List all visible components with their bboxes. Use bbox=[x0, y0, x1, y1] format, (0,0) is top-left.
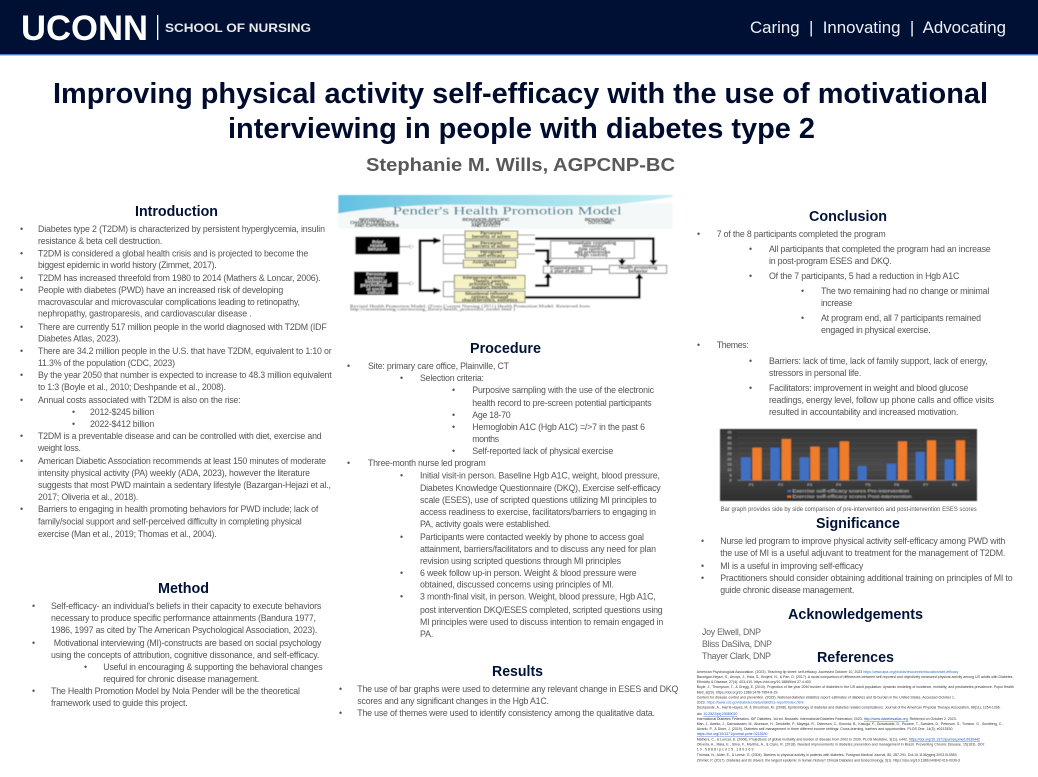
results bullets: The use of themes were used to identify consistency among the qualitative data. bbox=[357, 708, 655, 718]
procedure bullets: • bbox=[452, 385, 455, 395]
introduction bullets: American Diabetic Association recommends at least 150 minutes of moderate bbox=[38, 456, 326, 466]
diagram: Pender's Health Promotion Model: and preferences bbox=[574, 250, 611, 255]
reference list: https://doi.org/10/1371/journal.pone.0213530 bbox=[697, 732, 767, 736]
conclusion bullets: Barriers: lack of time, lack of family support, lack of energy, bbox=[769, 356, 988, 366]
method bullets: using the concepts of attribution, cognitive dissonance, and self-efficacy. bbox=[51, 650, 319, 660]
diagram: Pender's Health Promotion Model: behavior bbox=[628, 268, 648, 273]
diagram: Pender's Health Promotion Model: al socio- bbox=[367, 286, 386, 291]
introduction bullets: macrovascular and microvascular complications leading to retinopathy, bbox=[38, 297, 300, 307]
author: Stephanie M. Wills, AGPCNP-BC bbox=[366, 154, 675, 175]
method bullets: • bbox=[32, 601, 35, 611]
procedure bullets: obtained, discussed concerns using principles of MI. bbox=[420, 580, 614, 590]
diagram: Pender's Health Promotion Model: characteristics, esthetics bbox=[462, 298, 518, 303]
procedure bullets: • bbox=[400, 568, 403, 578]
panel: procedure bbox=[347, 341, 663, 639]
diagram: Pender's Health Promotion Model: Activity-related bbox=[473, 259, 506, 264]
x axis labels: P3 bbox=[807, 482, 813, 487]
diagram: Pender's Health Promotion Model: Personal bbox=[366, 272, 386, 277]
reference list: Centers for disease control and prevention. (2023). National diabetes statistics report: estimates of diabetes and its burden in the United States. Accessed October 1, bbox=[697, 696, 955, 700]
diagram: Pender's Health Promotion Model: biological bbox=[365, 279, 387, 284]
significance bullets: • bbox=[701, 536, 704, 546]
reference list: International Diabetes Federation. IDF Diabetes. 1st ed. Brussels: International Diabetes Federation; 2023. http://www.diabetesatlas.org. Retrieved on October 2, 2023. bbox=[697, 717, 957, 721]
introduction bullets: By the year 2050 that number is expected to increase to 48.3 million equivalent bbox=[38, 370, 332, 380]
procedure bullets: Three-month nurse led program bbox=[368, 458, 486, 468]
introduction bullets: • bbox=[20, 431, 23, 441]
diagram: Pender's Health Promotion Model: Perceived bbox=[480, 231, 502, 236]
diagram: Pender's Health Promotion Model: INDIVIDUAL bbox=[359, 217, 386, 222]
introduction bullets bbox=[20, 224, 332, 539]
introduction bullets: • bbox=[72, 407, 75, 417]
introduction bullets: 2022-$412 billion bbox=[90, 419, 154, 429]
procedure bullets: Hemoglobin A1C (Hgb A1C) =/>7 in the past 6 bbox=[472, 422, 645, 432]
y axis labels: 30 bbox=[727, 446, 732, 451]
diagram: Pender's Health Promotion Model: Commitment to bbox=[550, 265, 585, 270]
diagram: Pender's Health Promotion Model: demands bbox=[582, 244, 603, 249]
significance bullets: • bbox=[701, 561, 704, 571]
method bullets: required for chronic disease management. bbox=[103, 674, 259, 684]
reference list: Boyle, J., Thompson, T., & Gregg, E. (2010). Projection of the year 2050 burden of diabetes in the US adult population: dynamic modeling of incidence, mortality, and prediabetes prevalence. Popul Health bbox=[697, 685, 1014, 689]
reference list: Zimmet, P. (2017). Diabetes and its drivers: the largest epidemic in human history? Clinical Diabetes and Endocrinology, 3(1). https://doi.org/10.1186/s40842-016-0039-3 bbox=[697, 759, 960, 763]
panel: method bbox=[32, 581, 323, 708]
diagram: Pender's Health Promotion Model: COGNITIONS bbox=[471, 220, 501, 225]
results bullets: scores and any significant changes in the Hgb A1C. bbox=[357, 696, 549, 706]
conclusion bullets: resulted in accountability and increased motivation. bbox=[769, 407, 958, 417]
reference list: Thomas, N., Alder, E., & Leese, G. (2004). Barriers to physical activity in patients with diabetes. Postgrad Medical Journal, 80, 287-291. Doi:10.1136/pgmj.2003.010553 bbox=[697, 753, 957, 757]
x axis labels: P7 bbox=[923, 482, 929, 487]
procedure bullets: Participants were contacted weekly by phone to access goal bbox=[420, 532, 644, 542]
x axis labels: P6 bbox=[894, 482, 900, 487]
x axis labels: P5 bbox=[866, 482, 871, 487]
tagline: Caring | Innovating | Advocating bbox=[750, 18, 1006, 37]
heading: method: Method bbox=[158, 581, 209, 597]
heading: introduction: Introduction bbox=[135, 204, 218, 220]
conclusion bullets: 7 of the 8 participants completed the program bbox=[717, 229, 886, 239]
diagram: Pender's Health Promotion Model: Perceived bbox=[480, 250, 502, 255]
introduction bullets: nephropathy, gastroparesis, and cardiovascular disease . bbox=[38, 308, 252, 318]
significance bullets: the use of MI is a useful adjuvant to treatment for the management of T2DM. bbox=[720, 548, 1005, 558]
introduction bullets: T2DM is a preventable disease and can be controlled with diet, exercise and bbox=[38, 431, 322, 441]
bar chart: ESES pre vs post intervention bbox=[720, 429, 977, 501]
introduction bullets: There are 34.2 million people in the U.S. that have T2DM, equivalent to 1:10 or bbox=[38, 346, 332, 356]
diagram: Pender's Health Promotion Model: Immediate competing bbox=[568, 241, 616, 246]
procedure bullets: PA. bbox=[420, 629, 433, 639]
y axis labels: 5 bbox=[729, 472, 732, 477]
procedure bullets: PA, activity goals were established. bbox=[420, 519, 551, 529]
x axis labels: P8 bbox=[952, 482, 958, 487]
conclusion bullets: • bbox=[801, 313, 804, 323]
procedure bullets: scale (ESES), use of scripted questions utilizing MI principles to bbox=[420, 495, 657, 505]
conclusion bullets: The two remaining had no change or minimal bbox=[821, 286, 989, 296]
y axis labels: 20 bbox=[727, 456, 732, 461]
reference list: American Psychological Association. (2023). Teaching tip sheet: self-efficacy. Accessed October 10, 2023 https://www.apa.org/pi/aids/resources/education/self-efficacy bbox=[697, 670, 959, 674]
logo: UConn School of Nursing bbox=[21, 9, 311, 48]
x axis labels: P1 bbox=[749, 482, 755, 487]
introduction bullets: • bbox=[72, 419, 75, 429]
diagram: Pender's Health Promotion Model: http://currentnursing.com/nursing_theory/health_promotion_model.html ) bbox=[350, 307, 516, 312]
method bullets: • bbox=[32, 686, 35, 696]
diagram: Pender's Health Promotion Model: providers); norms, bbox=[469, 282, 510, 287]
diagram: Pender's Health Promotion Model: OUTCOME bbox=[588, 220, 612, 225]
introduction bullets: Annual costs associated with T2DM is also on the rise: bbox=[38, 395, 241, 405]
logo: UConn School of Nursing: UCONN bbox=[21, 9, 148, 48]
panel: references bbox=[697, 650, 1014, 763]
procedure bullets: post intervention DKQ/ESES completed, scripted questions using bbox=[420, 605, 663, 615]
method bullets: 1986, 1997 as cited by The American Psychological Association, 2023). bbox=[51, 625, 317, 635]
panel: significance bbox=[701, 516, 1013, 595]
y axis labels: 40 bbox=[727, 435, 732, 440]
reference list: Bazargan-Hejazi, S., Arroyo, J., Hsia, S., Brojeni, N., & Pan, D. (2017). A racial comparison of differences between self-reported and objectively measured physical activity among US adults with Diabetes. bbox=[697, 675, 1013, 679]
introduction bullets: • bbox=[20, 273, 23, 283]
reference list: Man, J., Aweko, J., Daivadanam, M., Alvesson, H., Delobelle, P., Mayega, R., Ostenson, C., Kirunda, B., Kasuga, F., Guwatudde, D., Puoane, T., Sanders, D., Peterson, S., Tomson, G., Sundberg, C., bbox=[697, 722, 1003, 726]
significance bullets: MI is a useful in improving self-efficacy bbox=[720, 561, 864, 571]
heading: acknowledgements: Acknowledgements bbox=[788, 607, 923, 623]
diagram: Pender's Health Promotion Model: support, models bbox=[472, 285, 508, 290]
diagram: Pender's Health Promotion Model: (High control) bbox=[577, 253, 608, 258]
method bullets bbox=[32, 601, 323, 708]
significance bullets: • bbox=[701, 573, 704, 583]
diagram: Pender's Health Promotion Model: BEHAVIORAL bbox=[585, 217, 615, 222]
chart legend: Exercise self-efficacy scores Pre-intervention bbox=[792, 488, 910, 493]
diagram: Pender's Health Promotion Model: Interpersonal influences bbox=[463, 275, 517, 280]
reference list: doi: 10.2522/ptj.20080020 bbox=[697, 712, 737, 716]
procedure bullets: months bbox=[472, 434, 500, 444]
panel: introduction bbox=[20, 204, 332, 539]
procedure bullets: • bbox=[400, 592, 403, 602]
method bullets: The Health Promotion Model by Nola Pender will be the theoretical bbox=[51, 686, 300, 696]
conclusion bullets: • bbox=[697, 340, 700, 350]
y axis labels: 25 bbox=[727, 451, 732, 456]
acknowledgement names: Bliss DaSilva, DNP bbox=[702, 639, 772, 649]
introduction bullets: weight loss. bbox=[37, 443, 81, 453]
procedure bullets: • bbox=[400, 532, 403, 542]
introduction bullets: • bbox=[20, 370, 23, 380]
x axis labels: P2 bbox=[778, 482, 784, 487]
procedure bullets: 6 week follow up-in person. Weight & blood pressure were bbox=[420, 568, 637, 578]
title: Improving physical activity self-efficacy with the use of motivational bbox=[53, 78, 988, 110]
diagram: Pender's Health Promotion Model: Perceived bbox=[480, 240, 502, 245]
procedure bullets: Site: primary care office, Plainville, CT bbox=[368, 361, 510, 371]
heading: references: References bbox=[817, 650, 894, 666]
procedure bullets: • bbox=[347, 458, 350, 468]
reference list: 10.5888/pcd15.180269 bbox=[697, 748, 753, 752]
y axis labels: 0 bbox=[729, 478, 732, 483]
heading: procedure: Procedure bbox=[470, 341, 541, 357]
conclusion bullets: At program end, all 7 participants remained bbox=[821, 313, 981, 323]
conclusion bullets bbox=[697, 229, 995, 417]
conclusion bullets: engaged in physical exercise. bbox=[821, 325, 931, 335]
introduction bullets: 11.3% of the population (CDC, 2023) bbox=[38, 358, 175, 368]
x axis labels bbox=[749, 482, 958, 487]
procedure bullets: health record to pre-screen potential participants bbox=[472, 398, 652, 408]
diagram: Pender's Health Promotion Model: Revised Health Promotion Model. (From Current Nursing (2011) Health Promotion Model. Retrieved from bbox=[350, 304, 591, 309]
introduction bullets: • bbox=[20, 285, 23, 295]
chart legend: Exercise self-efficacy scores Post-intervention bbox=[792, 494, 912, 499]
introduction bullets: • bbox=[20, 395, 23, 405]
diagram: Pender's Health Promotion Model: AND AFFECT bbox=[471, 223, 501, 228]
heading: results: Results bbox=[492, 664, 543, 680]
introduction bullets: T2DM has increased threefold from 1980 to 2014 (Mathers & Loncar, 2006). bbox=[38, 273, 321, 283]
conclusion bullets: in post-program ESES and DKQ. bbox=[769, 256, 892, 266]
x axis labels: P4 bbox=[836, 482, 842, 487]
reference list: Oliveira, A., Maia, E., Silva, F., Martins, A., & Claro, R. (2018). Needed improvements in diabetes prevention and management in Brazil. Preventing Chronic Disease, 15(163). DOI: bbox=[697, 742, 985, 746]
procedure bullets: Age 18-70 bbox=[472, 410, 511, 420]
diagram: Pender's Health Promotion Model: (family, peers, bbox=[474, 278, 505, 283]
significance bullets: Practitioners should consider obtaining additional training on principles of MI to bbox=[720, 573, 1013, 583]
reference list: Mathers, C., & Loncar, D. (2006). Projections of global mortality and burden of disease from 2002 to 2030. PLOS Medicine, 3(11), e442. https://doi.org/10.1371/journal.pmed.0030442 bbox=[697, 737, 980, 741]
introduction bullets: • bbox=[20, 322, 23, 332]
heading: conclusion: Conclusion bbox=[809, 209, 887, 225]
y axis labels: 45 bbox=[727, 430, 732, 435]
significance bullets: guide chronic disease management. bbox=[720, 585, 854, 595]
introduction bullets: 2017; Oliveria et al., 2018). bbox=[38, 492, 138, 502]
procedure bullets: Selection criteria: bbox=[420, 373, 484, 383]
introduction bullets: exercise (Man et al., 2019; Thomas et al., 2004). bbox=[38, 529, 217, 539]
introduction bullets: T2DM is considered a global health crisis and is projected to become the bbox=[38, 248, 308, 258]
y axis labels: 10 bbox=[727, 467, 732, 472]
pre-intervention bars bbox=[741, 448, 954, 480]
conclusion bullets: Facilitators: improvement in weight and blood glucose bbox=[769, 383, 968, 393]
procedure bullets: access readiness to exercise, facilitators/barriers to engaging in bbox=[420, 507, 656, 517]
diagram: Pender's Health Promotion Model: BEHAVIOR-SPECIFIC bbox=[462, 217, 510, 222]
title bbox=[53, 78, 988, 145]
reference list: Metr, 8(29). https://doi.org/10.1186/1478-7954-8-29 bbox=[697, 690, 777, 694]
conclusion bullets: stressors in personal life. bbox=[769, 368, 861, 378]
panel: conclusion bbox=[697, 209, 995, 417]
diagram: Pender's Health Promotion Model: Situational influences: bbox=[465, 291, 515, 296]
procedure bullets: Diabetes Knowledge Questionnaire (DKQ), Exercise self-efficacy bbox=[420, 483, 661, 493]
introduction bullets: • bbox=[20, 346, 23, 356]
diagram: Pender's Health Promotion Model: factors: bbox=[367, 275, 385, 280]
conclusion bullets: All participants that completed the program had an increase bbox=[769, 244, 991, 254]
introduction bullets: • bbox=[20, 248, 23, 258]
diagram: Pender's Health Promotion Model: self-efficacy bbox=[478, 253, 505, 258]
header banner bbox=[0, 0, 1038, 55]
procedure bullets: • bbox=[400, 471, 403, 481]
diagram: Pender's Health Promotion Model: Health-promoting bbox=[619, 265, 658, 270]
procedure bullets: Purposive sampling with the use of the electronic bbox=[472, 385, 655, 395]
reference list: Ethnicity & Disease, 27(4), 403-410. https://doi.org/10.18865/ed.27.4.403 bbox=[697, 680, 811, 684]
method bullets: • bbox=[84, 662, 87, 672]
conclusion bullets: • bbox=[749, 383, 752, 393]
conclusion bullets: • bbox=[801, 286, 804, 296]
diagram: Pender's Health Promotion Model: CHARACTERISTICS bbox=[350, 220, 395, 225]
results bullets: The use of bar graphs were used to determine any relevant change in ESES and DKQ bbox=[357, 684, 678, 694]
introduction bullets: family/social support and self-perceived difficulty in completing physical bbox=[38, 516, 302, 526]
acknowledgement names bbox=[702, 627, 772, 661]
diagram: Pender's Health Promotion Model: cultural bbox=[368, 290, 384, 295]
title: interviewing in people with diabetes type 2 bbox=[228, 113, 815, 145]
y axis labels bbox=[727, 430, 732, 483]
diagram: Pender's Health Promotion Model: AND EXPERIENCES bbox=[354, 223, 399, 228]
conclusion bullets: • bbox=[749, 244, 752, 254]
procedure bullets: • bbox=[400, 373, 403, 383]
diagram: Pender's Health Promotion Model: Prior bbox=[372, 239, 383, 244]
panel: results bbox=[339, 664, 678, 718]
reference list: 2023. https://www.cdc.gov/diabetes/data/statistics-report/index.html bbox=[697, 701, 804, 705]
panel: acknowledgements bbox=[702, 607, 923, 661]
procedure bullets: revision using scripted questions through MI principles bbox=[420, 556, 622, 566]
introduction bullets: There are currently 517 million people in the world diagnosed with T2DM (IDF bbox=[38, 322, 327, 332]
conclusion bullets: • bbox=[749, 356, 752, 366]
acknowledgement names: Joy Elwell, DNP bbox=[702, 627, 761, 637]
diagram: Pender's Health Promotion Model: affect bbox=[483, 263, 496, 268]
introduction bullets: to 1:3 (Boyle et al., 2010; Deshpande et al., 2008). bbox=[38, 382, 226, 392]
procedure bullets: 3 month-final visit, in person. Weight, blood pressure, Hgb A1C, bbox=[420, 592, 656, 602]
diagram: Pender's Health Promotion Model: a plan of action bbox=[550, 269, 585, 274]
procedure bullets bbox=[347, 361, 663, 639]
method bullets: Motivational interviewing (MI)-constructs are based on social psychology bbox=[54, 638, 322, 648]
diagram: Pender's Health Promotion Model: related bbox=[370, 243, 385, 248]
introduction bullets: • bbox=[20, 224, 23, 234]
introduction bullets: intensity physical activity (PA) weekly (ADA, 2023), however the literature bbox=[38, 468, 310, 478]
procedure bullets: Self-reported lack of physical exercise bbox=[472, 446, 613, 456]
procedure bullets: attainment, barriers/facilitators and to discuss any need for plan bbox=[420, 544, 656, 554]
diagram: Pender's Health Promotion Model bbox=[338, 195, 673, 312]
heading: significance: Significance bbox=[816, 516, 900, 532]
conclusion bullets: • bbox=[749, 271, 752, 281]
procedure bullets: MI principles were used to discuss intention to remain engaged in bbox=[420, 617, 663, 627]
results bullets bbox=[339, 684, 678, 718]
introduction bullets: Diabetes Atlas, 2023). bbox=[38, 334, 121, 344]
post-intervention bars bbox=[752, 439, 965, 480]
introduction bullets: • bbox=[20, 456, 23, 466]
conclusion bullets: increase bbox=[821, 298, 852, 308]
procedure bullets: • bbox=[452, 446, 455, 456]
method bullets: necessary to produce specific performance attainments (Bandura 1977, bbox=[51, 613, 316, 623]
introduction bullets: resistance & beta cell destruction. bbox=[38, 236, 162, 246]
results bullets: • bbox=[339, 684, 342, 694]
introduction bullets: 2012-$245 billion bbox=[90, 407, 154, 417]
diagram: Pender's Health Promotion Model: benefits of action bbox=[472, 234, 511, 239]
reference list bbox=[697, 670, 1014, 763]
diagram: Pender's Health Promotion Model: behavior bbox=[368, 247, 388, 252]
significance bullets bbox=[701, 536, 1013, 595]
conclusion bullets: Themes: bbox=[717, 340, 749, 350]
significance bullets: Nurse led program to improve physical activity self-efficacy among PWD with bbox=[720, 536, 1005, 546]
diagram: Pender's Health Promotion Model: psychological bbox=[360, 283, 392, 288]
logo: UConn School of Nursing: SCHOOL OF NURSING bbox=[165, 23, 311, 35]
conclusion bullets: readings, energy level, follow up phone calls and office visits bbox=[769, 395, 995, 405]
introduction bullets: • bbox=[20, 504, 23, 514]
chart legend bbox=[787, 488, 912, 499]
y axis labels: 15 bbox=[727, 462, 732, 467]
diagram: Pender's Health Promotion Model: (low control) bbox=[578, 247, 607, 252]
diagram: Pender's Health Promotion Model: options, demand bbox=[471, 294, 508, 299]
introduction bullets: People with diabetes (PWD) have an increased risk of developing bbox=[38, 285, 283, 295]
y axis labels: 35 bbox=[727, 440, 732, 445]
reference list: Alvarlo, P., & Diner, J. (2019). Diabetes self-management in three different income settings: Cross-learning, barriers and opportunities. PLOS One, 14(3), e0213530. bbox=[697, 727, 953, 731]
chart caption: Bar graph provides side by side comparison of pre-intervention and post-intervention ESES scores bbox=[721, 506, 977, 513]
results bullets: • bbox=[339, 708, 342, 718]
procedure bullets: • bbox=[452, 410, 455, 420]
introduction bullets: biggest epidemic in world history (Zimmet, 2017). bbox=[38, 260, 217, 270]
conclusion bullets: Of the 7 participants, 5 had a reduction in Hgb A1C bbox=[769, 271, 960, 281]
acknowledgement names: Thayer Clark, DNP bbox=[702, 651, 771, 661]
method bullets: framework used to guide this project. bbox=[51, 698, 188, 708]
conclusion bullets: • bbox=[697, 229, 700, 239]
method bullets: • bbox=[32, 638, 35, 648]
introduction bullets: suggests that most PWD maintain a sedentary lifestyle (Bazargan-Hejazi et al., bbox=[38, 480, 331, 490]
introduction bullets: Barriers to engaging in health promoting behaviors for PWD include; lack of bbox=[38, 504, 319, 514]
introduction bullets: Diabetes type 2 (T2DM) is characterized by persistent hyperglycemia, insulin bbox=[38, 224, 325, 234]
method bullets: Useful in encouraging & supporting the behavioral changes bbox=[103, 662, 323, 672]
diagram: Pender's Health Promotion Model: barriers of action bbox=[472, 244, 511, 249]
method bullets: Self-efficacy- an individual's beliefs in their capacity to execute behaviors bbox=[51, 601, 322, 611]
procedure bullets: Initial visit-in person. Baseline Hgb A1C, weight, blood pressure, bbox=[420, 471, 660, 481]
diagram: Pender's Health Promotion Model: Pender's Health Promotion Model bbox=[393, 206, 622, 218]
reference list: Deshpande, A., Harris-Hayes, M. & Shootman, M. (2008). Epidemiology of diabetes and diabetes related complications. Journal of the American Physical Therapy Association, 88(11), 1254-1266. bbox=[697, 706, 1001, 710]
procedure bullets: • bbox=[347, 361, 350, 371]
procedure bullets: • bbox=[452, 422, 455, 432]
